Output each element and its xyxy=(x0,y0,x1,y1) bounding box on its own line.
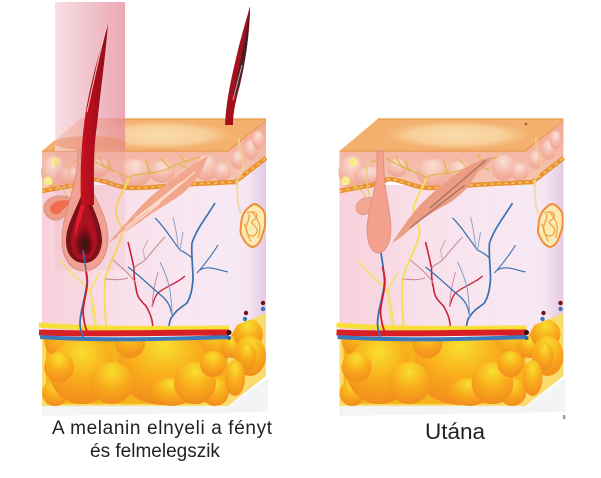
icon: second hair xyxy=(225,6,250,125)
panel: skin before treatment xyxy=(39,2,268,416)
icon: hair muscle xyxy=(108,156,208,243)
decorative mark xyxy=(563,415,566,419)
icon: sebaceous gland xyxy=(44,196,80,220)
caption: before: A melanin elnyeli a fényt xyxy=(52,418,273,439)
caption: before: és felmelegszik xyxy=(90,441,220,462)
icon: sebaceous gland after xyxy=(356,198,378,215)
caption: after: Utána xyxy=(425,419,486,444)
panel: skin after treatment xyxy=(336,119,566,416)
icon: small hair stub xyxy=(525,123,527,125)
icon: hair muscle after xyxy=(392,157,493,243)
caption: before xyxy=(52,418,273,462)
icon: hair shaft xyxy=(81,24,108,205)
icon: follicle bulb xyxy=(62,150,108,271)
light beam xyxy=(54,2,126,270)
icon: empty follicle xyxy=(367,151,391,253)
